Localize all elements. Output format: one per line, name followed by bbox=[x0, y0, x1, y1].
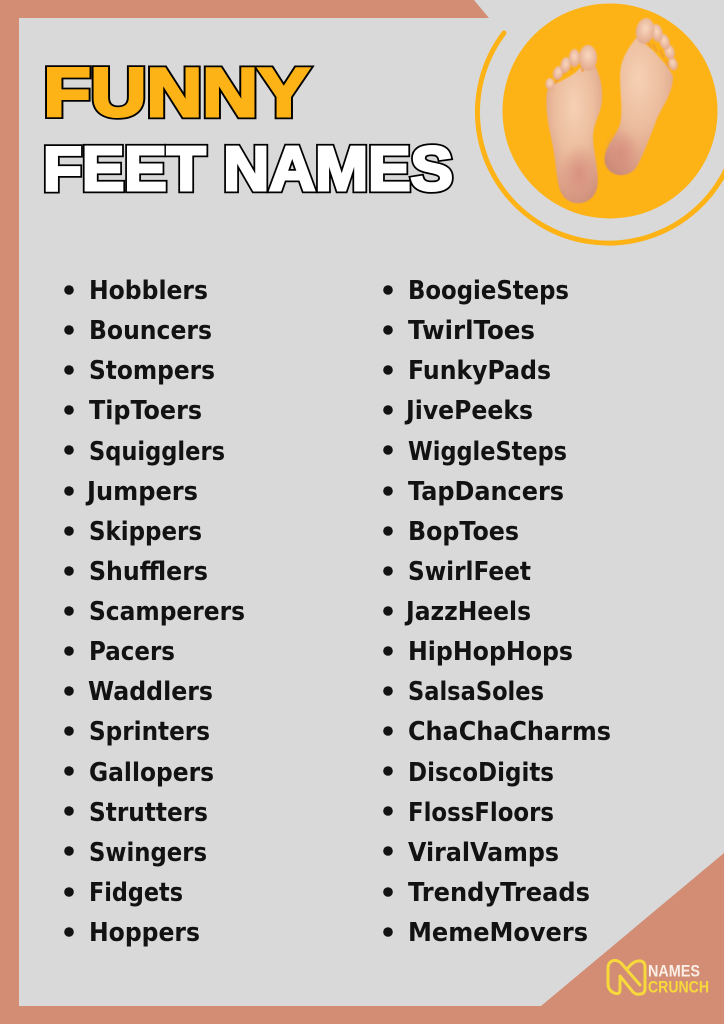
list item: JazzHeels bbox=[404, 597, 531, 627]
list item: TwirlToes bbox=[408, 316, 535, 346]
right name list bbox=[383, 276, 611, 948]
heading line: FEET NAMES: FEET NAMES bbox=[43, 134, 453, 204]
list item: SwirlFeet bbox=[408, 557, 531, 587]
heading line: FEET NAMES: FEET NAMES bbox=[43, 134, 453, 204]
yellow circle bbox=[502, 4, 718, 218]
logo text: NAMES bbox=[648, 962, 700, 980]
list item: Strutters bbox=[89, 798, 208, 828]
list item: Fidgets bbox=[89, 878, 183, 908]
logo text bbox=[648, 962, 709, 996]
list item: Waddlers bbox=[88, 677, 213, 707]
list item: TapDancers bbox=[408, 477, 564, 507]
logo: Names Crunch bbox=[608, 960, 709, 996]
list item: Sprinters bbox=[89, 717, 210, 747]
list item: Gallopers bbox=[89, 758, 214, 788]
list item: ChaChaCharms bbox=[408, 717, 611, 747]
list item: Stompers bbox=[89, 356, 215, 386]
list item: TrendyTreads bbox=[408, 878, 590, 908]
title bbox=[43, 54, 453, 204]
right foot bbox=[603, 17, 679, 177]
heading line: FUNNY: FUNNY bbox=[44, 54, 310, 131]
list item: JivePeeks bbox=[404, 396, 533, 426]
left name list bbox=[64, 276, 245, 948]
list item: Bouncers bbox=[89, 316, 212, 346]
list item: HipHopHops bbox=[408, 637, 573, 667]
list item: Squigglers bbox=[89, 437, 225, 467]
list item: Pacers bbox=[89, 637, 175, 667]
list item: WiggleSteps bbox=[408, 437, 567, 467]
heading line: FUNNY: FUNNY bbox=[44, 54, 310, 131]
list item: Hoppers bbox=[89, 918, 200, 948]
logo text: CRUNCH bbox=[648, 978, 709, 996]
logo mark bbox=[608, 960, 645, 994]
list item: Shufflers bbox=[89, 557, 208, 587]
list item: Scamperers bbox=[89, 597, 245, 627]
list item: MemeMovers bbox=[408, 918, 588, 948]
list item: Swingers bbox=[89, 838, 207, 868]
list item: Skippers bbox=[89, 517, 202, 547]
yellow arc bbox=[477, 33, 724, 243]
list item: ViralVamps bbox=[408, 838, 559, 868]
list item: SalsaSoles bbox=[408, 677, 544, 707]
icon: feet in yellow circle bbox=[477, 4, 724, 243]
list item: Jumpers bbox=[85, 477, 198, 507]
list item: FlossFloors bbox=[408, 798, 554, 828]
list item: FunkyPads bbox=[408, 356, 551, 386]
list item: BopToes bbox=[408, 517, 519, 547]
list item: BoogieSteps bbox=[408, 276, 569, 306]
left foot bbox=[546, 45, 602, 203]
list item: DiscoDigits bbox=[408, 758, 554, 788]
list item: Hobblers bbox=[89, 276, 208, 306]
list item: TipToers bbox=[89, 396, 202, 426]
